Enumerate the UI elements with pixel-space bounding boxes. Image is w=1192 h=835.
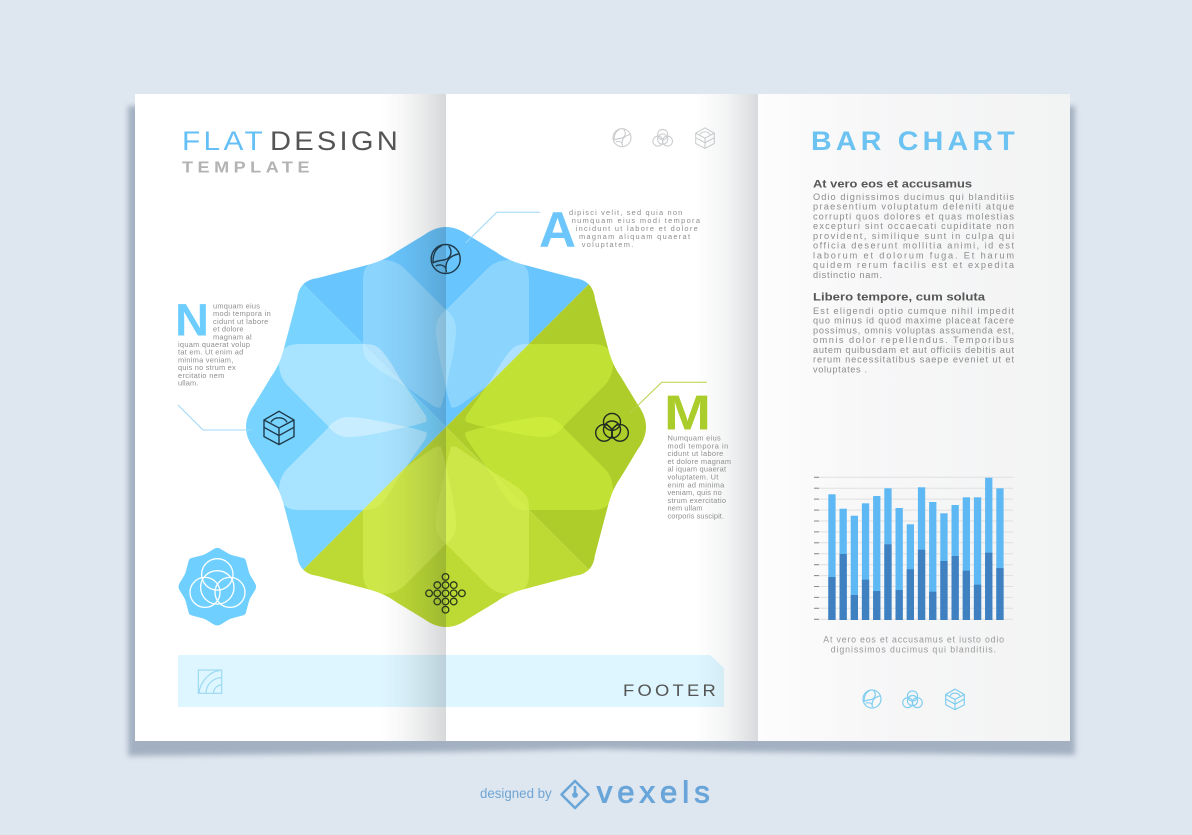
text block M: Numquam eius: [668, 434, 721, 443]
callout N: [175, 295, 271, 388]
text block M: al iquam quaerat: [668, 465, 726, 474]
text block N: ullam.: [178, 378, 198, 388]
credit text: designed by: [480, 786, 552, 801]
text block N: iquam quaerat volup: [178, 340, 250, 349]
paragraph 2: autem quibusdam et aut officiis debitis aut: [813, 345, 1014, 355]
leader line M: [630, 382, 707, 413]
title: TEMPLATE: [182, 159, 314, 176]
heading: bar chart: BAR CHART: [811, 126, 1019, 156]
icon: grey circles: [653, 129, 672, 146]
icon: dot diamond: [426, 574, 465, 613]
letter M: M: [664, 386, 711, 440]
chart caption: At vero eos et accusamus et iusto odio: [823, 634, 1004, 644]
icon: overlapping circles: [596, 413, 628, 441]
paragraph 1: corrupti quos dolores et quas molestias: [813, 212, 1014, 222]
footer icon: [198, 670, 222, 693]
text block A: voluptatem.: [582, 240, 633, 249]
text block N: modi tempora in: [213, 309, 271, 318]
text block A: incidunt ut labore et dolore: [576, 224, 698, 233]
text block N: minima veniam,: [178, 355, 233, 364]
subheading 2: Libero tempore, cum soluta: [813, 292, 986, 304]
callout A: [539, 202, 701, 258]
paragraph 1: [813, 192, 1015, 280]
text block N: cidunt ut labore: [213, 317, 268, 326]
title: [182, 126, 401, 176]
text section 1: [813, 178, 1015, 280]
footer label: FOOTER: [623, 681, 719, 700]
text block M: veniam, quis no: [668, 488, 722, 497]
fold shading: right crease: [695, 94, 758, 741]
text block A: dipisci velit, sed quia non: [569, 208, 682, 217]
text block N: magnam al: [213, 332, 252, 341]
paragraph 1: officia deserunt mollitia animi, id est: [813, 241, 1014, 251]
paragraph 1: quidem rerum facilis est et expedita: [813, 260, 1015, 270]
subheading 1: At vero eos et accusamus: [813, 178, 972, 190]
icon: grey cube: [696, 128, 714, 148]
paragraph 1: laborum et dolorum fuga. Et harum: [813, 250, 1014, 260]
text block M: corporis suscipit.: [668, 511, 724, 520]
icon: blue cube: [946, 689, 964, 710]
text block N: umquam eius: [213, 302, 260, 310]
chart caption: [823, 634, 1004, 654]
paragraph 2: rerum necessitatibus saepe eveniet ut et: [813, 355, 1014, 365]
text block A: [569, 208, 701, 249]
paragraph 1: praesentium voluptatum deleniti atque: [813, 202, 1014, 212]
paragraph 1: Odio dignissimos ducimus qui blanditiis: [813, 192, 1014, 202]
text block M: voluptatem. Ut: [668, 472, 718, 482]
footer band: [178, 655, 724, 707]
title: FLAT: [182, 126, 266, 156]
paragraph 1: distinctio nam.: [813, 270, 882, 280]
logo diamond: [562, 781, 588, 808]
icon: blue ball: [863, 690, 881, 708]
credit: designed by vexels: [480, 774, 710, 809]
petals on blue half: [279, 260, 529, 510]
text block M: cidunt ut labore: [668, 449, 723, 458]
paragraph 2: voluptates .: [813, 364, 867, 374]
letter A: A: [539, 202, 576, 258]
paragraph 1: provident, similique sunt in culpa qui: [813, 231, 1014, 241]
text block M: [668, 434, 731, 520]
brochure shadow: [128, 106, 1075, 756]
brochure pages: [135, 94, 1070, 741]
icon row: blue bottom icons: [863, 689, 964, 710]
icon: blue circles: [903, 691, 922, 708]
letter N: N: [175, 295, 209, 346]
text block M: nem ullam: [668, 504, 702, 512]
title: DESIGN: [270, 126, 401, 156]
leader line N: [178, 405, 253, 430]
text block N: tat em. Ut enim ad: [178, 348, 243, 357]
text block M: strum exercitatio: [668, 496, 726, 505]
callout M: [664, 386, 731, 520]
paragraph 2: omnis dolor repellendus. Temporibus: [813, 335, 1014, 345]
badge circles: [190, 559, 245, 607]
paragraph 2: [813, 306, 1014, 374]
paragraph 2: quo minus id quod maxime placeat facere: [813, 316, 1014, 326]
badge shape: [178, 548, 256, 626]
bar chart: [814, 477, 1013, 620]
text section 2: [813, 292, 1014, 374]
badge icon: [178, 548, 256, 626]
leader line A: [466, 212, 540, 243]
icon: cube: [264, 411, 294, 445]
text block A: numquam eius modi tempora: [572, 216, 701, 225]
text block N: [178, 302, 271, 388]
text block N: quis no strum ex: [178, 363, 236, 372]
paragraph 2: Est eligendi optio cumque nihil impedit: [813, 306, 1014, 316]
text block M: enim ad minima: [668, 480, 725, 489]
icon: grey ball: [613, 129, 631, 147]
star base colours: [246, 227, 646, 627]
icon: ball: [431, 244, 460, 274]
chart caption: dignissimos ducimus qui blanditiis.: [831, 644, 996, 654]
icon row: grey top icons: [613, 128, 714, 148]
fold shading: left crease: [380, 94, 446, 741]
petals on green half: [363, 344, 613, 594]
octagonal star diagram: [246, 227, 646, 627]
paragraph 1: excepturi sint occaecati cupiditate non: [813, 221, 1014, 231]
logo wordmark: vexels: [597, 774, 710, 809]
text block N: et dolore: [213, 325, 244, 334]
text block A: magnam aliquam quaerat: [579, 232, 690, 241]
text block N: ercitatio nem: [178, 371, 224, 380]
paragraph 2: possimus, omnis voluptas assumenda est,: [813, 326, 1014, 336]
text block M: modi tempora in: [668, 442, 728, 450]
text block M: et dolore magnam: [668, 457, 731, 466]
